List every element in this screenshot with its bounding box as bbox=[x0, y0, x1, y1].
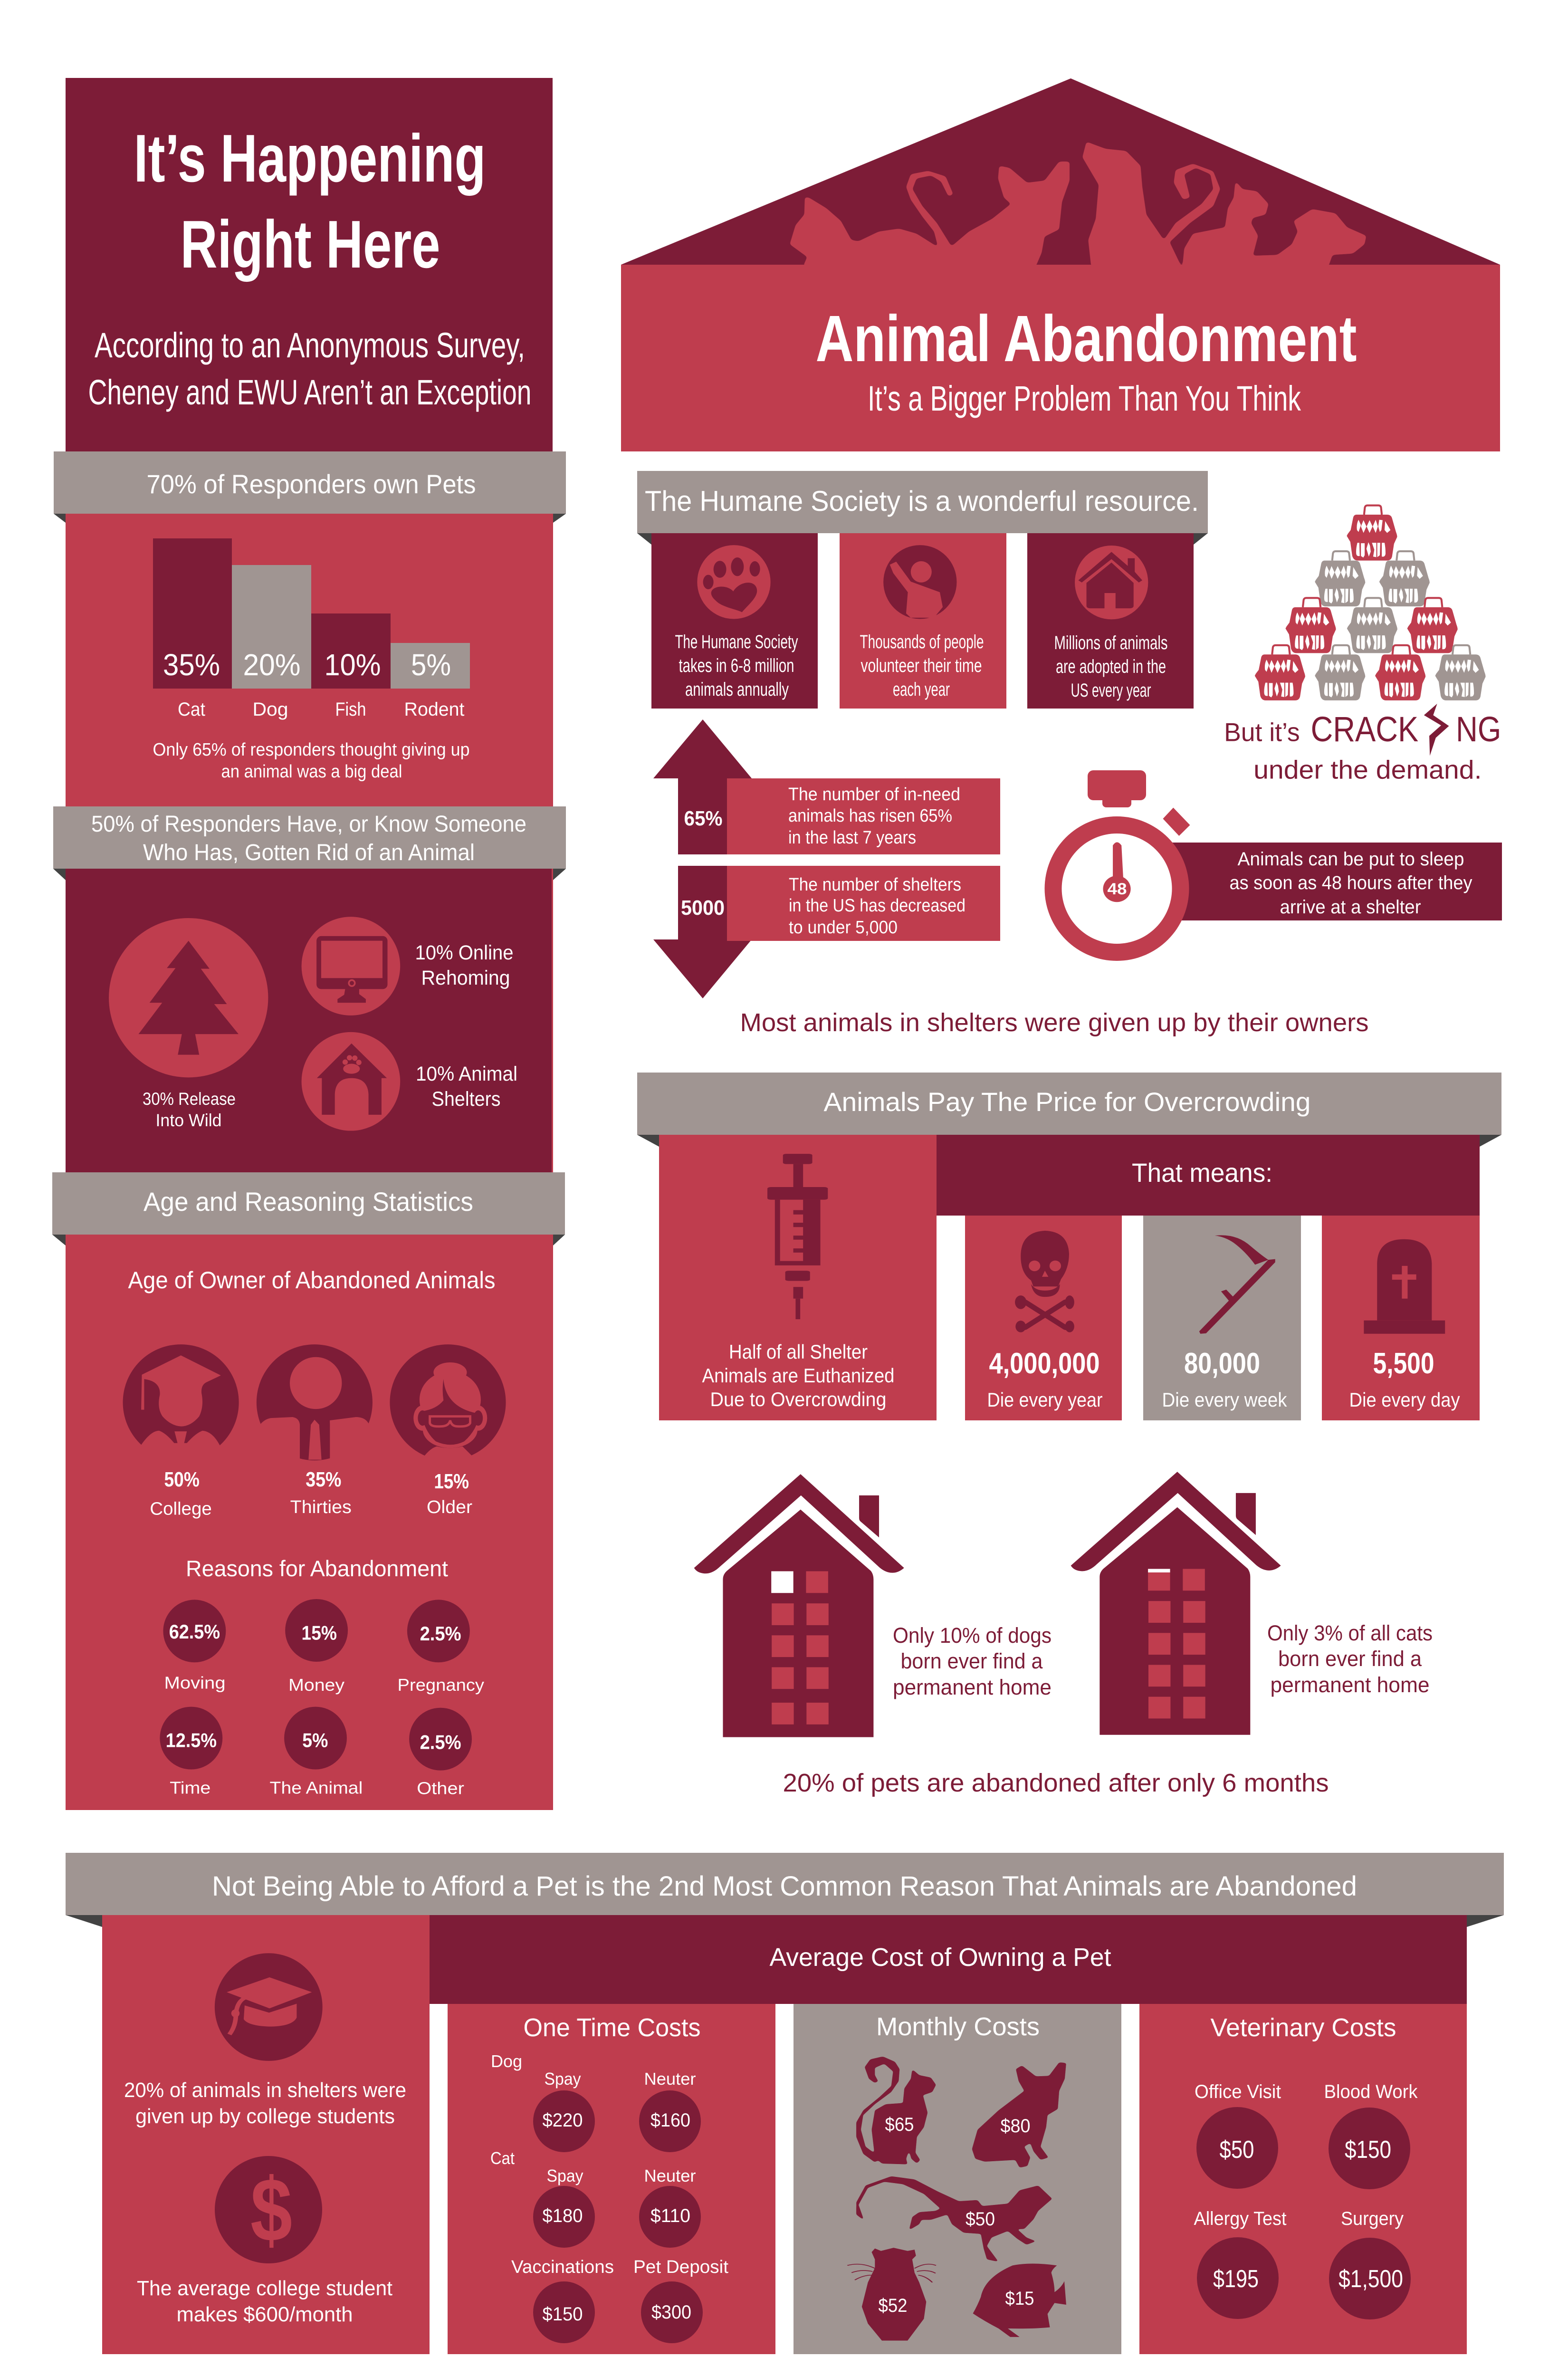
card: one time costs: One Time Costs bbox=[524, 2013, 700, 2042]
stat: falling shelters with down arrow: The number of shelters bbox=[789, 875, 961, 895]
card: one time costs: $300 bbox=[651, 2302, 691, 2323]
callout: 48 hours with stopwatch: Animals can be put to sleep bbox=[1237, 849, 1464, 870]
panel: animals pay the price bbox=[637, 1073, 1501, 1420]
card: takes in animals: animals annually bbox=[685, 679, 789, 700]
card: volunteers bbox=[840, 533, 1006, 709]
card: veterinary costs: Blood Work bbox=[1324, 2081, 1418, 2102]
bar chart: Fish bbox=[335, 699, 366, 720]
text: only 10% of dogs: permanent home bbox=[893, 1675, 1052, 1699]
card: veterinary costs: Surgery bbox=[1341, 2208, 1404, 2229]
panel: It's Happening Right Here header bbox=[66, 78, 553, 451]
header: average cost: Average Cost of Owning a Pet bbox=[770, 1943, 1111, 1972]
card: veterinary costs: $150 bbox=[1345, 2136, 1391, 2164]
bar chart: Dog bbox=[253, 699, 288, 720]
label: animal shelters: 10% Animal bbox=[416, 1063, 517, 1085]
reasons grid: 15% bbox=[302, 1622, 337, 1644]
card: die every day: 5,500 bbox=[1373, 1347, 1434, 1380]
text: only 10% of dogs: Only 10% of dogs bbox=[893, 1623, 1052, 1648]
icon: gravestone bbox=[1364, 1239, 1445, 1334]
icon: fish silhouette bbox=[973, 2264, 1066, 2337]
panel: pet ownership bar chart bbox=[66, 514, 553, 806]
card: die every year bbox=[965, 1216, 1122, 1420]
text: only 3% of cats: permanent home bbox=[1271, 1673, 1429, 1697]
card: veterinary costs: Office Visit bbox=[1195, 2081, 1281, 2102]
stat: rising need with up arrow: 65% bbox=[684, 807, 722, 830]
note: giving up an animal: Only 65% of responders thought giving up bbox=[153, 740, 469, 760]
panel: Humane Society bbox=[637, 471, 1208, 709]
card: veterinary costs: $50 bbox=[1219, 2136, 1254, 2164]
heading band: 70% of responders own pets bbox=[54, 451, 566, 523]
heading band: Not Being Able to Afford a Pet is the 2nd Most Common Reason That Animals are Abandoned bbox=[212, 1871, 1357, 1902]
card: die every year: 4,000,000 bbox=[989, 1347, 1100, 1380]
icon: dollar sign: $ bbox=[250, 2160, 292, 2261]
card: monthly costs: $52 bbox=[878, 2295, 908, 2316]
reasons grid: 12.5% bbox=[166, 1729, 217, 1751]
icon: dog house bbox=[302, 1032, 400, 1131]
note: giving up an animal: an animal was a big deal bbox=[221, 762, 402, 782]
bar chart: Cat bbox=[178, 699, 205, 720]
card: volunteers: volunteer their time bbox=[861, 655, 982, 676]
card: one time costs: Pet Deposit bbox=[633, 2257, 728, 2277]
icon: house with one dog window lit bbox=[694, 1474, 904, 1737]
card: one time costs: $150 bbox=[543, 2304, 583, 2325]
bar chart: 10% bbox=[324, 648, 381, 682]
header: that means: That means: bbox=[1132, 1158, 1272, 1188]
icon: syringe bbox=[767, 1154, 828, 1319]
heading band: The Humane Society is a wonderful resource. bbox=[645, 485, 1199, 517]
panel: college students: The average college student bbox=[137, 2277, 392, 2300]
icon: tree bbox=[109, 918, 268, 1077]
icon: scythe bbox=[1199, 1235, 1275, 1334]
card: one time costs: Neuter bbox=[644, 2166, 696, 2185]
card: euthanized: Due to Overcrowding bbox=[710, 1388, 887, 1410]
icon: graduation cap bbox=[215, 1953, 323, 2061]
stat: rising need with up arrow: animals has risen 65% bbox=[788, 806, 952, 826]
card: one time costs: $160 bbox=[650, 2110, 690, 2131]
heading band bbox=[637, 471, 1208, 533]
silhouettes: cats and dogs on roof bbox=[790, 142, 1367, 266]
text: only 10% of dogs bbox=[893, 1623, 1052, 1699]
icon: hamster silhouette bbox=[847, 2248, 936, 2341]
card: takes in animals bbox=[651, 533, 818, 709]
heading band: age and reasoning bbox=[52, 1172, 565, 1245]
icon: college student bbox=[123, 1344, 239, 1465]
icon: second cat silhouette bbox=[972, 2062, 1066, 2168]
label: release into wild bbox=[143, 1089, 236, 1130]
text: only 10% of dogs: born ever find a bbox=[901, 1649, 1043, 1673]
heading band bbox=[66, 1853, 1504, 1915]
card: one time costs: $180 bbox=[543, 2205, 583, 2226]
card: volunteers: Thousands of people bbox=[860, 632, 984, 652]
age stats: 15% bbox=[434, 1470, 469, 1493]
icon: stopwatch: 48 bbox=[1107, 880, 1127, 898]
panel: age and reasoning statistics bbox=[66, 1235, 553, 1810]
reasons grid: 2.5% bbox=[420, 1731, 461, 1753]
panel: what happens to the animals bbox=[66, 869, 553, 1173]
card: die every day bbox=[1322, 1216, 1480, 1420]
card: veterinary costs: Veterinary Costs bbox=[1211, 2013, 1396, 2042]
text: but it's cracking under the demand bbox=[1224, 704, 1501, 784]
stat: rising need with up arrow: The number of in-need bbox=[788, 785, 960, 805]
callout: 48 hours with stopwatch: as soon as 48 hours after they bbox=[1230, 872, 1472, 893]
heading band: 50% of responders: Who Has, Gotten Rid of an Animal bbox=[143, 840, 475, 865]
card: one time costs: $220 bbox=[543, 2110, 583, 2131]
heading band: 70% of responders own pets: 70% of Responders own Pets bbox=[146, 469, 476, 499]
card: monthly costs: $15 bbox=[1005, 2288, 1034, 2309]
icon: thirties adult bbox=[256, 1344, 376, 1465]
age stats: 35% bbox=[306, 1468, 341, 1491]
label: release into wild: Into Wild bbox=[156, 1111, 221, 1130]
icon: lizard silhouette bbox=[856, 2176, 1052, 2262]
fold corners bbox=[637, 533, 1208, 545]
label: animal shelters: Shelters bbox=[431, 1088, 501, 1111]
title: It's Happening: It’s Happening bbox=[134, 121, 486, 196]
card: die every year: Die every year bbox=[987, 1389, 1103, 1411]
banner: animal abandonment house roof bbox=[621, 78, 1500, 451]
heading band bbox=[637, 1073, 1501, 1135]
stat: falling shelters with down arrow: in the US has decreased bbox=[789, 896, 966, 916]
reasons grid: 62.5% bbox=[169, 1620, 220, 1643]
card: one time costs bbox=[448, 2004, 775, 2354]
card: monthly costs: $65 bbox=[885, 2114, 914, 2135]
reasons grid: 2.5% bbox=[420, 1622, 461, 1645]
text: but it's cracking under the demand: CRACK bbox=[1310, 709, 1418, 749]
subtitle line 2: Cheney and EWU Aren’t an Exception bbox=[88, 373, 531, 412]
card: euthanized: Half of all Shelter bbox=[729, 1341, 868, 1363]
label: online rehoming bbox=[415, 941, 513, 989]
icon: monitor bbox=[302, 917, 400, 1016]
text: only 3% of cats: Only 3% of all cats bbox=[1267, 1621, 1433, 1645]
panel: college students: 20% of animals in shelters were bbox=[124, 2079, 406, 2102]
icon: stopwatch bbox=[1044, 770, 1190, 961]
panel: college students: given up by college students bbox=[135, 2105, 395, 2128]
callout: 48 hours with stopwatch: arrive at a shelter bbox=[1280, 897, 1421, 918]
title: Right Here: Right Here bbox=[181, 207, 440, 282]
text: most animals given up by owners: Most animals in shelters were given up by their owners bbox=[740, 1008, 1368, 1037]
card: veterinary costs: $1,500 bbox=[1339, 2265, 1403, 2293]
icon: dollar sign bbox=[215, 2156, 322, 2263]
heading: age of owner: Age of Owner of Abandoned Animals bbox=[128, 1267, 495, 1293]
callout: 48 hours with stopwatch bbox=[1044, 770, 1502, 961]
bar chart bbox=[153, 538, 470, 720]
card: volunteers: each year bbox=[893, 679, 950, 700]
stat: rising need with up arrow bbox=[653, 719, 1000, 854]
stat: falling shelters with down arrow bbox=[653, 866, 1000, 998]
card: monthly costs: Monthly Costs bbox=[876, 2012, 1040, 2041]
card: euthanized: Animals are Euthanized bbox=[702, 1364, 894, 1387]
text: only 3% of cats bbox=[1267, 1621, 1433, 1697]
heading band: 50% of responders: 50% of Responders Have, or Know Someone bbox=[91, 812, 526, 837]
label: animal shelters bbox=[416, 1063, 517, 1111]
title: Animal Abandonment: Animal Abandonment bbox=[815, 302, 1357, 375]
reasons grid: 5% bbox=[302, 1729, 328, 1751]
panel: college students: makes $600/month bbox=[177, 2303, 353, 2326]
age stats bbox=[150, 1468, 472, 1519]
header: average cost bbox=[430, 1915, 1467, 2004]
card: one time costs: Cat bbox=[490, 2148, 515, 2168]
panel: college students bbox=[102, 1915, 430, 2354]
heading band: Animals Pay The Price for Overcrowding bbox=[824, 1087, 1310, 1117]
card: one time costs: Spay bbox=[545, 2069, 581, 2089]
icon: pyramid of pet carriers bbox=[1255, 506, 1486, 700]
icon: skull and crossbones bbox=[1015, 1231, 1074, 1332]
age stats: Older bbox=[427, 1497, 472, 1517]
age stats: College bbox=[150, 1499, 212, 1519]
card: adoptions: Millions of animals bbox=[1054, 632, 1168, 653]
card: adoptions bbox=[1027, 533, 1194, 709]
text: only 3% of cats: born ever find a bbox=[1278, 1647, 1422, 1671]
reasons grid: Time bbox=[170, 1778, 210, 1798]
card: monthly costs: $50 bbox=[966, 2209, 995, 2230]
label: online rehoming: 10% Online bbox=[415, 941, 513, 964]
card: die every week: 80,000 bbox=[1184, 1347, 1260, 1380]
card: veterinary costs: $195 bbox=[1213, 2265, 1259, 2293]
panel: cost of owning a pet bbox=[66, 1853, 1504, 2354]
label: online rehoming: Rehoming bbox=[421, 967, 510, 989]
bar chart: 5% bbox=[411, 648, 451, 682]
reasons grid: Money bbox=[288, 1675, 345, 1695]
reasons grid: The Animal bbox=[270, 1778, 363, 1798]
icon: older woman bbox=[390, 1344, 506, 1470]
subtitle line 1: According to an Anonymous Survey, bbox=[95, 326, 525, 365]
stat: falling shelters with down arrow: 5000 bbox=[681, 896, 725, 920]
age stats: Thirties bbox=[290, 1497, 352, 1517]
age stats: 50% bbox=[164, 1468, 200, 1491]
card: adoptions: US every year bbox=[1071, 680, 1151, 701]
bar chart: 35% bbox=[163, 648, 220, 682]
reasons grid: Pregnancy bbox=[398, 1675, 485, 1695]
card: one time costs: Spay bbox=[546, 2166, 583, 2185]
card: die every day: Die every day bbox=[1349, 1389, 1460, 1411]
card: die every week: Die every week bbox=[1162, 1389, 1287, 1411]
icon: volunteer raising hand bbox=[883, 545, 956, 619]
card: monthly costs bbox=[794, 2004, 1121, 2354]
subtitle: bigger problem: It’s a Bigger Problem Than You Think bbox=[868, 379, 1301, 418]
stat: falling shelters with down arrow: to under 5,000 bbox=[789, 918, 898, 938]
reasons grid bbox=[160, 1599, 485, 1798]
icon: paw with heart bbox=[697, 545, 771, 619]
reasons grid: Moving bbox=[164, 1673, 226, 1693]
card: one time costs: $110 bbox=[650, 2205, 690, 2226]
heading: reasons for abandonment: Reasons for Abandonment bbox=[186, 1556, 448, 1581]
reasons grid: Other bbox=[417, 1778, 464, 1798]
card: die every week bbox=[1143, 1216, 1301, 1420]
label: release into wild: 30% Release bbox=[143, 1089, 236, 1109]
card: adoptions: are adopted in the bbox=[1056, 656, 1166, 677]
header: that means bbox=[937, 1135, 1480, 1216]
stat: rising need with up arrow: in the last 7 years bbox=[788, 828, 916, 848]
card: one time costs: Vaccinations bbox=[511, 2257, 614, 2277]
text: but it's cracking under the demand: But it’s bbox=[1224, 718, 1300, 747]
card: veterinary costs bbox=[1139, 2004, 1467, 2354]
bar chart: 20% bbox=[243, 648, 300, 682]
heading band: age and reasoning: Age and Reasoning Statistics bbox=[143, 1187, 473, 1217]
heading band: 50% of responders bbox=[53, 806, 566, 880]
card: monthly costs: $80 bbox=[1001, 2116, 1030, 2136]
card: veterinary costs: Allergy Test bbox=[1194, 2208, 1287, 2229]
card: one time costs: Dog bbox=[491, 2051, 522, 2071]
text: but it's cracking under the demand: under the demand. bbox=[1253, 755, 1482, 784]
icon: cat silhouette bbox=[856, 2057, 936, 2165]
text: 20% of pets abandoned: 20% of pets are abandoned after only 6 months bbox=[783, 1769, 1329, 1797]
card: euthanized bbox=[659, 1135, 937, 1420]
card: one time costs: Neuter bbox=[644, 2069, 696, 2089]
icon: house with sliver of cat window lit bbox=[1071, 1472, 1281, 1735]
icon: home bbox=[1075, 546, 1148, 619]
card: takes in animals: The Humane Society bbox=[675, 632, 798, 652]
card: takes in animals: takes in 6-8 million bbox=[679, 655, 794, 676]
bar chart: Rodent bbox=[404, 699, 465, 720]
text: but it's cracking under the demand: NG bbox=[1456, 709, 1501, 749]
note: giving up an animal bbox=[153, 740, 469, 782]
